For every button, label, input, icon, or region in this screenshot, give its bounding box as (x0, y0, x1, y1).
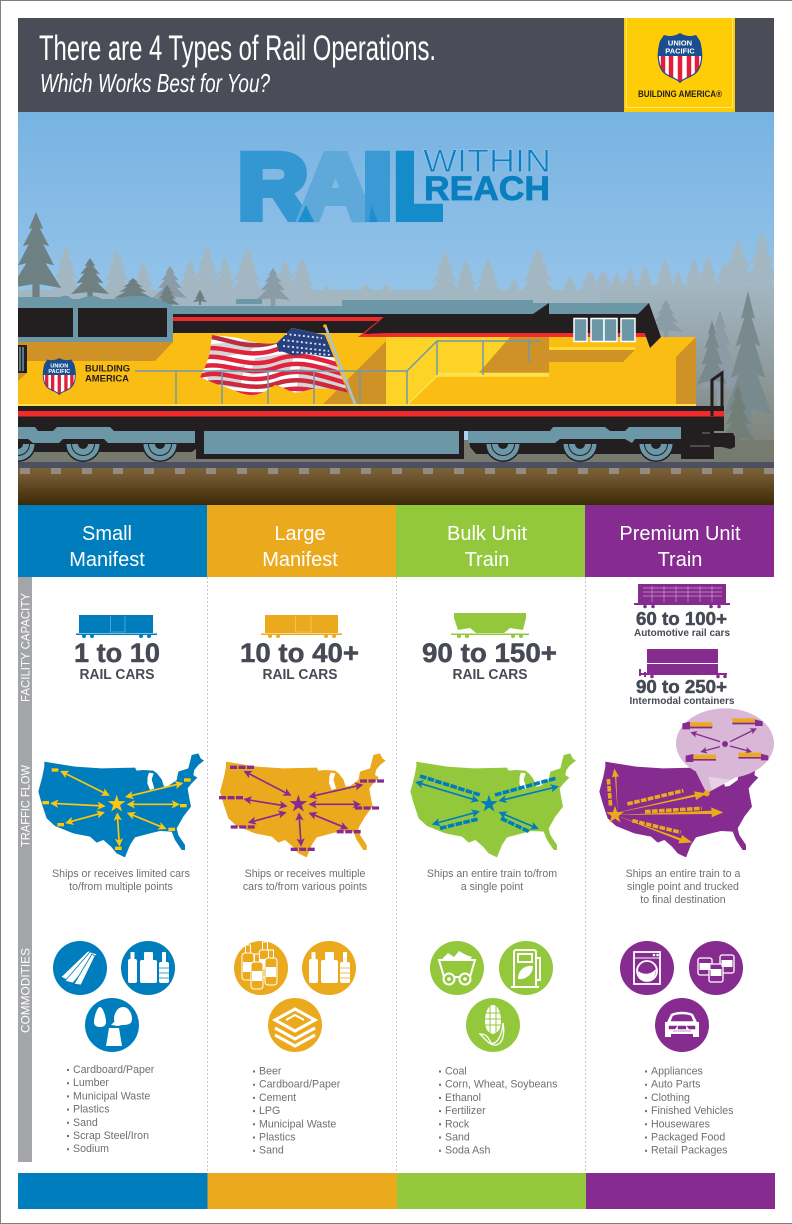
commodities list: Packaged Food (651, 1132, 725, 1144)
capacity figure: RAIL CARS (262, 667, 338, 683)
logo: Rail Within Reach: A (299, 136, 372, 238)
icon: plastic bottles (121, 941, 175, 995)
commodities list: Auto Parts (651, 1079, 700, 1091)
icon: corn (466, 998, 520, 1052)
header: premium unit train: Premium Unit (619, 523, 741, 545)
fuel tank (196, 431, 464, 459)
logo: Rail Within Reach: WITHIN (423, 143, 551, 179)
commodities list (439, 1066, 557, 1157)
locomotive lettering (85, 365, 130, 382)
header: large manifest (207, 505, 396, 577)
caption (626, 868, 741, 906)
panel: bulk unit train (410, 613, 576, 1157)
panel: large manifest (219, 615, 386, 1157)
commodities list: Corn, Wheat, Soybeans (445, 1079, 557, 1091)
caption: Ships an entire train to a (626, 868, 741, 880)
icon: plastic bottles (302, 941, 356, 995)
header: small manifest (18, 505, 207, 577)
side labels: TRAFFIC FLOW (18, 764, 32, 847)
header: large manifest: Large (274, 523, 326, 545)
capacity figure: intermodal (630, 677, 735, 707)
logo: Rail Within Reach: REACH (424, 170, 550, 208)
logo: Union Pacific Building America: BUILDING AMERICA® (638, 89, 722, 100)
caption (52, 868, 190, 893)
caption: Ships or receives multiple (245, 868, 365, 880)
callout: truck distribution (676, 708, 774, 796)
commodities list: Housewares (651, 1118, 710, 1130)
column headers (18, 505, 774, 577)
header: premium unit train: Train (658, 549, 702, 571)
commodities list: Cardboard/Paper (259, 1079, 341, 1091)
front handrail (712, 373, 722, 416)
logo: Rail Within Reach: R (238, 136, 308, 238)
logo: Union Pacific Building America (624, 18, 735, 112)
commodities list: Sodium (73, 1143, 109, 1155)
capacity figure: 10 to 40+ (240, 638, 359, 668)
icon: lumber (53, 941, 107, 995)
icon: box car (76, 615, 157, 638)
commodities list: Retail Packages (651, 1145, 728, 1157)
capacity figure: RAIL CARS (452, 667, 528, 683)
commodities list: Plastics (259, 1132, 296, 1144)
commodities list: Coal (445, 1066, 467, 1078)
caption: single point and trucked (627, 881, 739, 893)
logo: Rail Within Reach: I (362, 136, 392, 238)
commodities list: Beer (259, 1066, 282, 1078)
icon: auto rack car (634, 584, 730, 608)
map: bulk unit train traffic flow (410, 753, 576, 857)
header: small manifest: Manifest (69, 549, 145, 571)
commodities list: Appliances (651, 1066, 703, 1078)
hero illustration (0, 112, 785, 505)
flag (195, 324, 355, 404)
cab windows and body (18, 342, 549, 404)
commodities list: Fertilizer (445, 1105, 486, 1117)
caption: Ships an entire train to/from (427, 868, 557, 880)
caption (243, 868, 367, 893)
icon: hopper car (451, 613, 529, 638)
trucks and wheels (0, 427, 681, 462)
logo: Rail Within Reach: L (394, 136, 442, 238)
trees (18, 212, 774, 440)
capacity figure (74, 638, 160, 683)
header: bulk unit train: Train (465, 549, 509, 571)
capacity figure: automotive: 60 to 100+ (636, 609, 727, 629)
header: premium unit train (585, 505, 774, 577)
caption: Ships or receives limited cars (52, 868, 190, 880)
commodities list: Municipal Waste (259, 1118, 336, 1130)
icon: washing machine (620, 941, 674, 995)
side labels (18, 577, 32, 1162)
header: bulk unit train (396, 505, 585, 577)
commodities list (253, 1066, 341, 1157)
header: bulk unit train: Bulk Unit (447, 523, 527, 545)
commodities list: Lumber (73, 1077, 109, 1089)
column dividers (208, 577, 586, 1172)
map: large manifest traffic flow (219, 753, 386, 857)
icon: beer bottles (234, 941, 288, 995)
lighter walkway panels (386, 337, 510, 404)
commodities list: LPG (259, 1105, 280, 1117)
logo: locomotive shield: UNION (50, 363, 68, 369)
capacity figure: intermodal: Intermodal containers (630, 695, 735, 707)
trucks (690, 718, 761, 759)
logo: locomotive shield: PACIFIC (48, 369, 70, 375)
title: There are 4 Types of Rail Operations. (39, 29, 436, 68)
commodities list (645, 1066, 733, 1157)
caption: a single point (461, 881, 523, 893)
header banner (18, 18, 774, 112)
header: small manifest: Small (82, 523, 132, 545)
icon: finished vehicle (655, 998, 709, 1052)
side labels: COMMODITIES (18, 948, 32, 1033)
panel: premium unit train (599, 584, 774, 1157)
capacity figure: 1 to 10 (74, 638, 160, 668)
footer colour band (18, 1173, 775, 1209)
commodities list: Scrap Steel/Iron (73, 1130, 149, 1142)
capacity figure: 90 to 150+ (422, 638, 557, 668)
capacity figure: automotive (634, 609, 730, 639)
caption (427, 868, 557, 893)
icon: cardboard stack (268, 998, 322, 1052)
logo: locomotive shield (42, 358, 77, 396)
icon: ethanol pump (499, 941, 553, 995)
icon: box car (261, 615, 342, 638)
commodities list: Sand (259, 1145, 284, 1157)
locomotive lettering: AMERICA (85, 374, 129, 384)
train routes (606, 768, 723, 843)
commodities list: Cement (259, 1092, 296, 1104)
side labels: FACILITY CAPACITY (18, 593, 32, 702)
logo: Union Pacific Building America: PACIFIC (665, 46, 695, 56)
commodities list: Municipal Waste (73, 1090, 150, 1102)
commodities list: Cardboard/Paper (73, 1064, 155, 1076)
capacity figure (240, 638, 359, 683)
map: premium unit train traffic flow (599, 708, 774, 857)
commodities list: Plastics (73, 1104, 110, 1116)
subtitle: Which Works Best for You? (40, 68, 270, 98)
map: small manifest traffic flow (38, 753, 204, 857)
commodities list: Rock (445, 1118, 470, 1130)
capacity figure: RAIL CARS (80, 667, 155, 683)
commodities list: Sand (445, 1132, 470, 1144)
icon: coal cart (430, 941, 484, 995)
capacity figure (422, 638, 557, 683)
commodities list: Soda Ash (445, 1145, 490, 1157)
icon: packaged food cans (689, 941, 743, 995)
side handrail (135, 341, 540, 404)
frame and stripes (18, 404, 696, 406)
panel: small manifest (38, 615, 204, 1155)
icon: sodium and sand (85, 998, 139, 1052)
logo: Rail Within Reach (240, 149, 548, 222)
logo: Union Pacific Building America: UNION (668, 38, 692, 48)
commodities list (67, 1064, 155, 1155)
caption: to/from multiple points (69, 881, 173, 893)
caption: cars to/from various points (243, 881, 367, 893)
commodities list: Finished Vehicles (651, 1105, 733, 1117)
header: large manifest: Manifest (262, 549, 338, 571)
capacity figure: intermodal: 90 to 250+ (636, 677, 727, 697)
locomotive (0, 296, 735, 462)
pilot and coupler (681, 431, 735, 459)
locomotive lettering: BUILDING (85, 364, 130, 374)
commodities list: Sand (73, 1117, 98, 1129)
rail track (18, 462, 774, 505)
icon: intermodal car (640, 649, 727, 678)
ground behind train (18, 440, 774, 463)
capacity figure: automotive: Automotive rail cars (634, 627, 730, 639)
commodities list: Clothing (651, 1092, 690, 1104)
commodities list: Ethanol (445, 1092, 481, 1104)
caption: to final destination (640, 894, 726, 906)
